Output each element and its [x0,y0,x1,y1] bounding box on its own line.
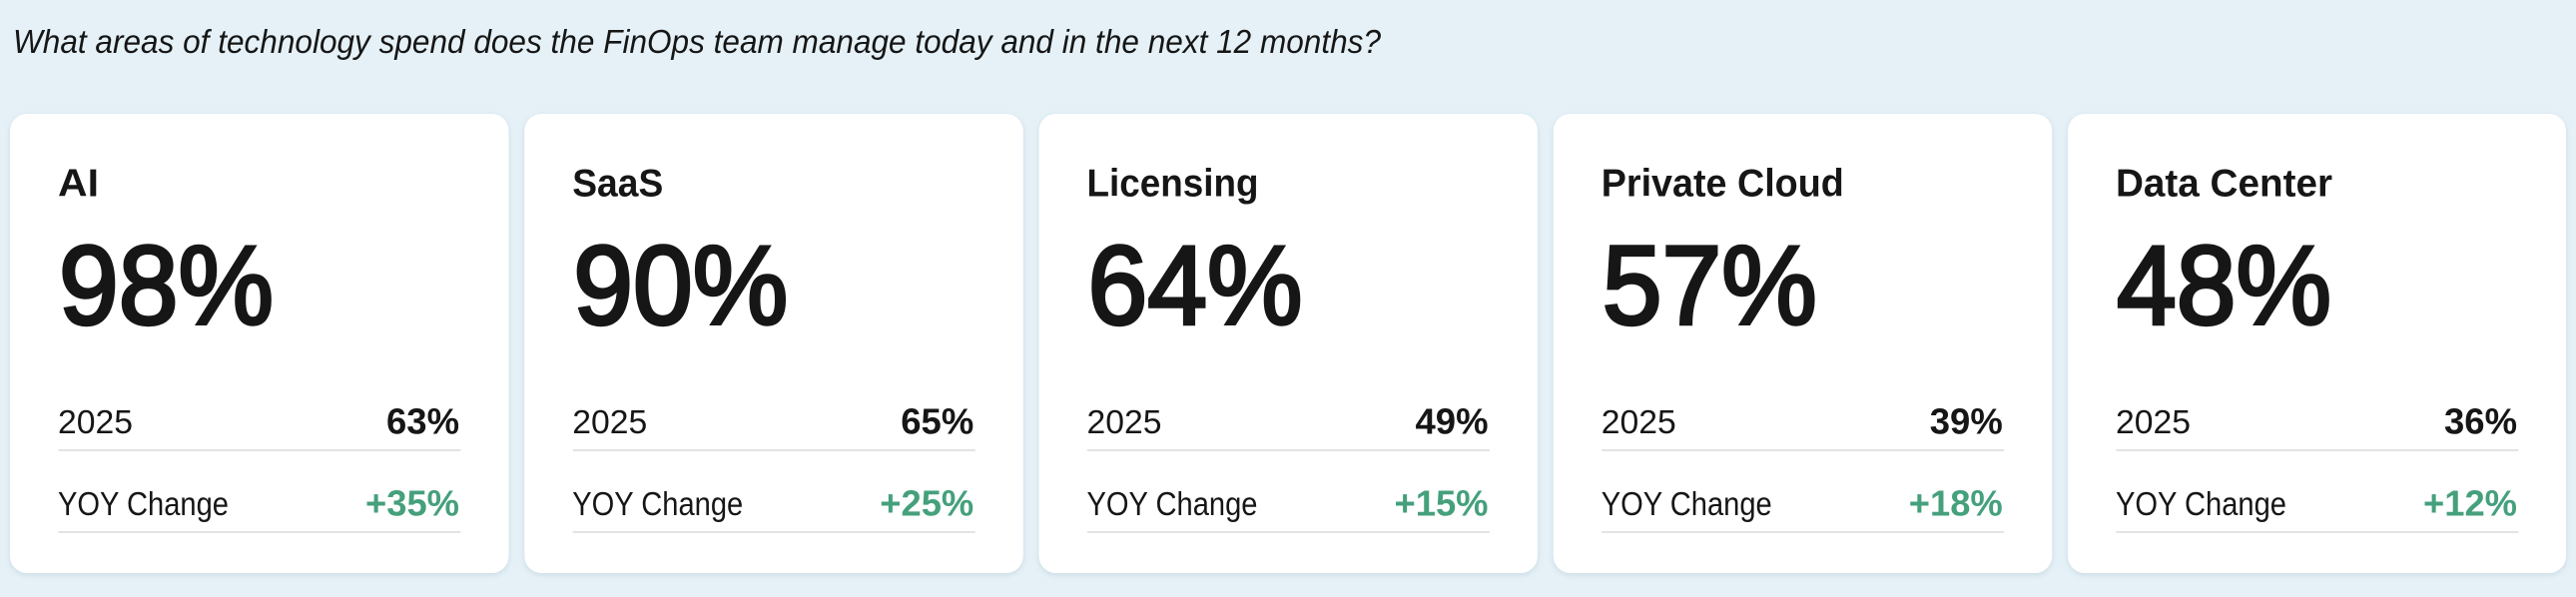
row: YOY value: +25% [880,483,973,523]
row: YOY value: +18% [1909,483,2003,523]
stat: 90%: 90% [573,224,788,347]
row: 2025 value: 49% [1416,401,1488,441]
row: YOY label: YOY Change [1086,486,1258,523]
stat: 98%: 98% [59,224,274,347]
row: YOY label: YOY Change [572,486,743,523]
row: 2025 label: 2025 [58,404,133,441]
heading: Data Center: Data Center [2116,162,2332,206]
stat: 64%: 64% [1088,224,1302,347]
row: YOY value: +12% [2423,483,2517,523]
row: 2025 label: 2025 [572,404,647,441]
row: 2025 label: 2025 [2116,404,2191,441]
row: 2025 label: 2025 [1602,404,1676,441]
row: YOY value: +35% [365,483,459,523]
heading: Licensing: Licensing [1086,162,1258,206]
panel: Private Cloud [1554,114,2052,573]
stat: 57%: 57% [1603,224,1817,347]
stat: 48%: 48% [2117,224,2331,347]
row: 2025 value: 65% [901,401,973,441]
row: 2025 label: 2025 [1086,404,1162,441]
row: YOY label: YOY Change [1602,486,1772,523]
panel: Licensing [1038,114,1538,573]
row: 2025 value: 39% [1930,401,2003,441]
panel: AI [10,114,509,573]
title: What areas of technology spend does the FinOps team manage today and in the next 12 months? [13,23,1382,60]
row: YOY label: YOY Change [2116,486,2286,523]
row: 2025 value: 36% [2444,401,2517,441]
row: 2025 value: 63% [386,401,459,441]
heading: SaaS: SaaS [572,162,663,206]
heading: Private Cloud: Private Cloud [1602,162,1844,206]
panel: SaaS [524,114,1023,573]
panel: Data Center [2068,114,2566,573]
row: YOY value: +15% [1394,483,1488,523]
heading: AI: AI [58,162,99,206]
row: YOY label: YOY Change [58,486,229,523]
